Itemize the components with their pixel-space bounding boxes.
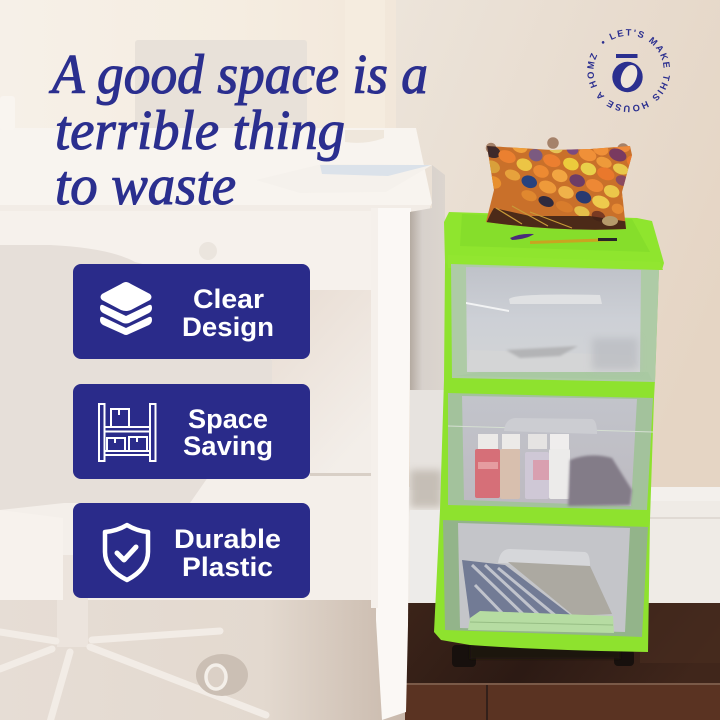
- feature badge: durable plastic: [73, 503, 310, 598]
- title: terrible thing: [55, 100, 345, 162]
- label: Plastic: [182, 552, 273, 582]
- label: [183, 404, 273, 461]
- label: Saving: [183, 431, 273, 461]
- floor left: [0, 600, 405, 720]
- paint bottles: [475, 434, 570, 499]
- label: Space: [188, 404, 268, 434]
- striped item: [462, 560, 572, 620]
- title: A good space is a: [48, 44, 428, 106]
- lower wall under desk: [0, 285, 372, 600]
- label: [174, 524, 281, 582]
- desk: [0, 96, 432, 720]
- chair base: [0, 555, 266, 720]
- drawer 3: [443, 520, 648, 637]
- icon: stacked layers: [100, 282, 152, 335]
- label: Clear: [193, 284, 265, 314]
- notebook and pen: [256, 164, 432, 193]
- drawer 2: [448, 393, 653, 510]
- pencil on lid: [510, 234, 617, 244]
- label: Durable: [174, 524, 281, 554]
- handle: [498, 549, 590, 566]
- cup on desk: [345, 130, 384, 143]
- label: [182, 284, 274, 342]
- title: [48, 44, 428, 217]
- green stack: [468, 611, 614, 633]
- grey folder: [508, 562, 612, 616]
- feature badge: space saving: [73, 384, 310, 479]
- wall shadow beside desk: [410, 165, 445, 390]
- laptop: [135, 40, 307, 158]
- product: green three-drawer cart: [434, 93, 664, 667]
- cart frame: [434, 262, 659, 652]
- colourful pouch: [486, 137, 632, 230]
- logo: Let's make this house a Homz badge: [587, 29, 670, 112]
- title: to waste: [55, 155, 236, 217]
- baseboard: [405, 390, 720, 604]
- handle: [504, 418, 597, 434]
- chair back: [0, 245, 272, 510]
- wooden floor right: [405, 603, 720, 720]
- icon: storage shelf with boxes: [99, 404, 156, 461]
- cart lid: [444, 212, 664, 270]
- dark item in drawer: [568, 455, 632, 506]
- feature badge: clear design: [73, 264, 310, 359]
- wall panel behind chair: [0, 510, 63, 600]
- cart wheels: [452, 645, 634, 667]
- drawer 1: [451, 264, 659, 382]
- logo ring text: • LET'S MAKE THIS HOUSE A HOMZ: [587, 29, 670, 112]
- icon: shield with check: [105, 525, 148, 580]
- logo letter o with macron: [612, 54, 643, 92]
- label: Design: [182, 312, 274, 342]
